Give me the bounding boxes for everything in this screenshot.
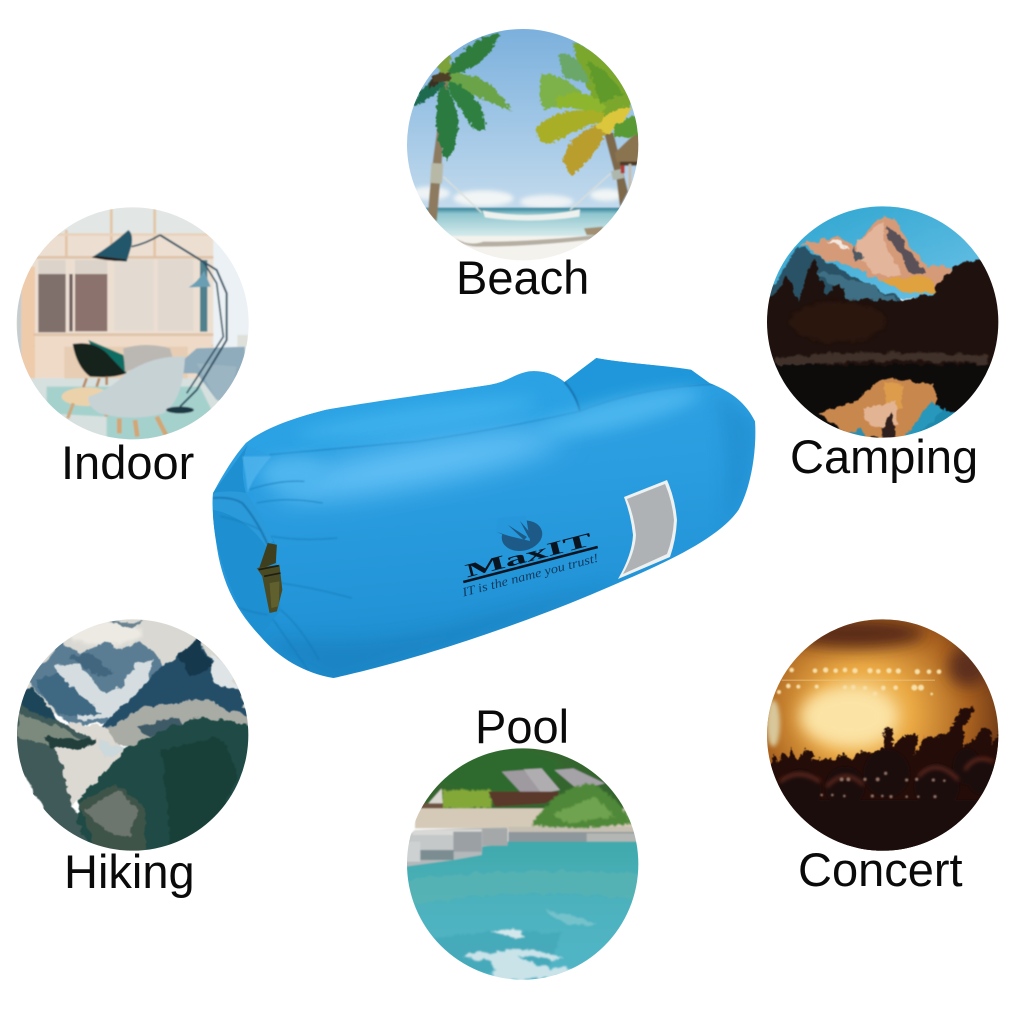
label: Camping: Camping bbox=[790, 430, 978, 483]
logo: MaxIT bbox=[460, 516, 600, 600]
panel: camping photo bbox=[767, 206, 998, 438]
product: blue inflatable lounger bbox=[213, 358, 755, 678]
label: Indoor: Indoor bbox=[61, 436, 194, 489]
panel: hiking photo bbox=[17, 619, 248, 851]
logo mark bbox=[496, 516, 545, 555]
panel: pool photo bbox=[407, 748, 638, 980]
label: Hiking: Hiking bbox=[64, 845, 195, 898]
panel: indoor photo bbox=[16, 208, 248, 440]
panel: beach photo bbox=[407, 29, 638, 260]
mesh pocket bbox=[618, 480, 677, 579]
lounger body bbox=[213, 358, 755, 678]
label: Concert: Concert bbox=[798, 843, 963, 896]
icon: side buckle bbox=[257, 543, 282, 613]
wordmark: MaxIT bbox=[463, 529, 595, 582]
tagline: IT is the name you trust! bbox=[460, 551, 600, 600]
label: Beach: Beach bbox=[456, 251, 589, 304]
panel: concert photo bbox=[767, 619, 998, 851]
label: Pool: Pool bbox=[475, 700, 569, 753]
